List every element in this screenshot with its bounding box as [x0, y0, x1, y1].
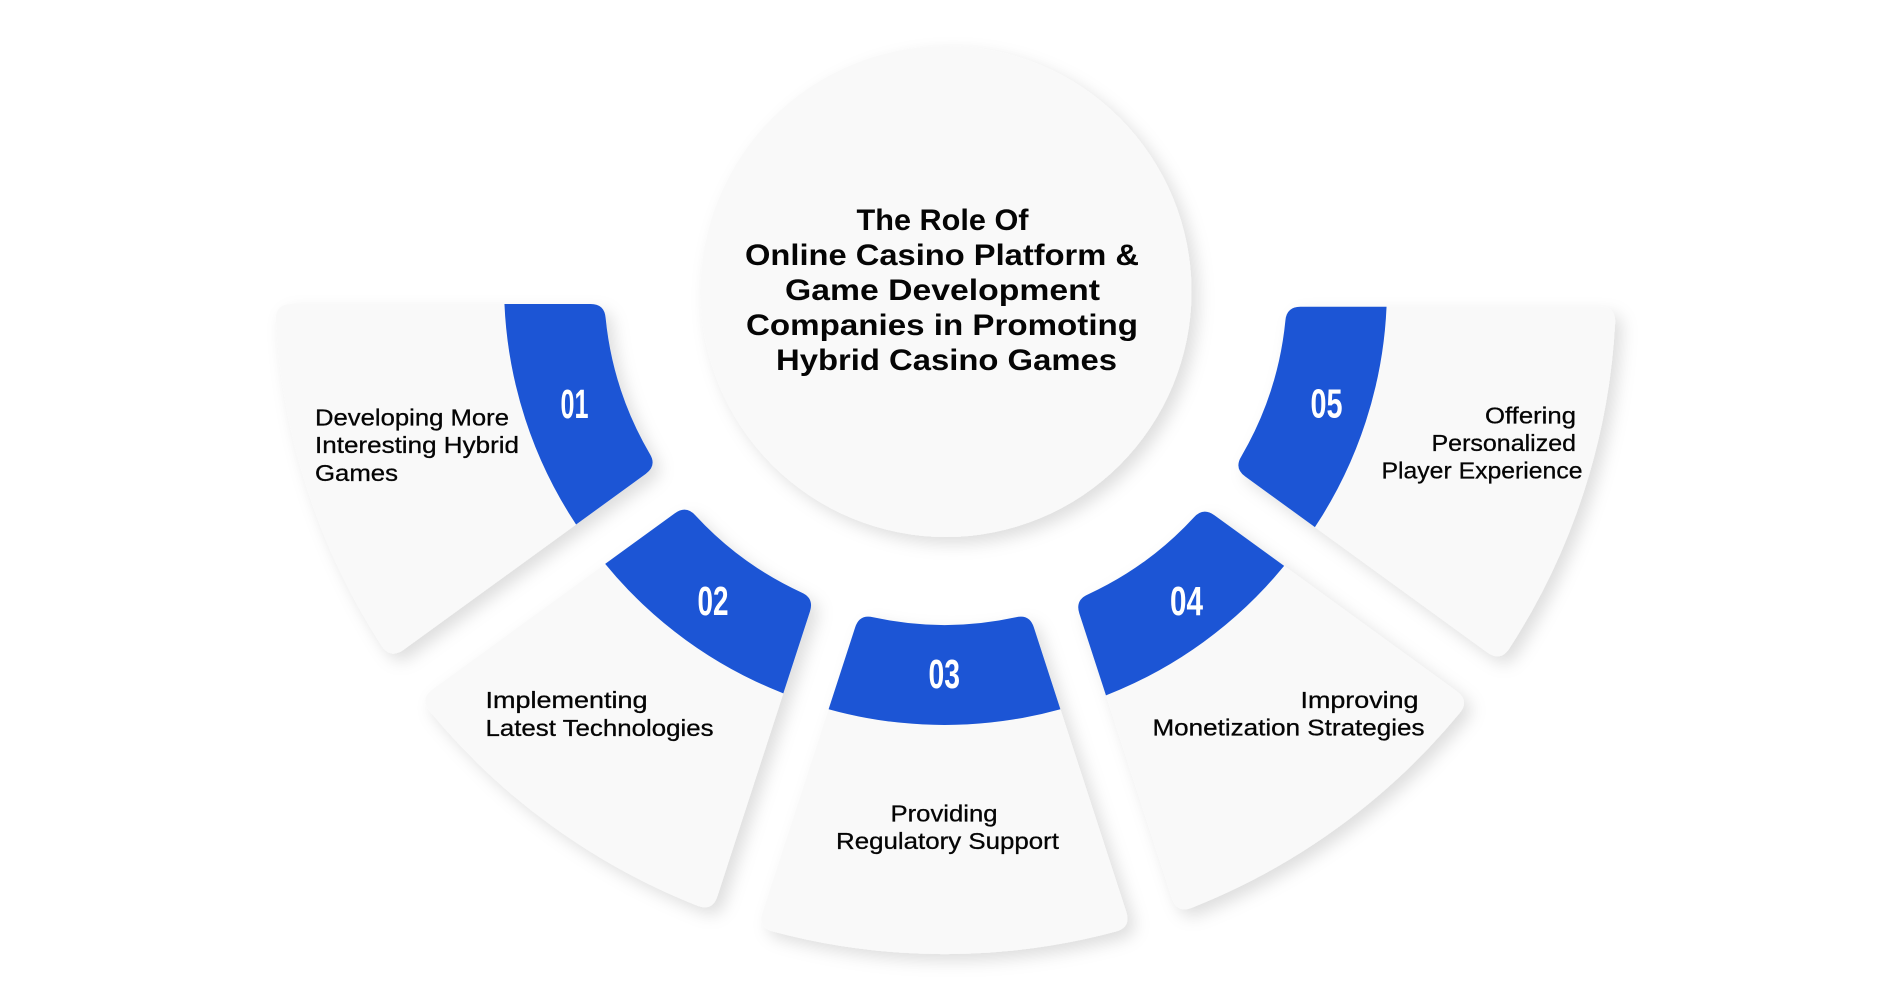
- title: The Role Of: [856, 204, 1030, 237]
- title: Companies in Promoting: [746, 309, 1138, 342]
- label 01: Interesting Hybrid: [315, 432, 519, 458]
- wedge 05: [1206, 214, 1640, 667]
- panel 04: monetization strategies: [997, 451, 1481, 932]
- label 04: [1152, 687, 1424, 740]
- panel 05: personalized experience: [1206, 214, 1640, 667]
- label 03: Providing: [890, 800, 998, 826]
- wedge 03: [762, 617, 1127, 954]
- label 01: Games: [315, 460, 398, 486]
- number 02: 02: [698, 578, 728, 624]
- title: Hybrid Casino Games: [776, 344, 1117, 377]
- number 05: 05: [1310, 380, 1342, 426]
- number 04: 04: [1170, 578, 1203, 624]
- panel 02: latest technologies: [408, 449, 892, 930]
- label 04: Improving: [1300, 687, 1418, 713]
- label 03: Regulatory Support: [836, 828, 1060, 854]
- wedge 01: [251, 212, 685, 664]
- label 04: Monetization Strategies: [1152, 714, 1424, 740]
- label 01: [315, 404, 519, 486]
- label 05: Personalized: [1432, 430, 1576, 456]
- label 05: [1382, 402, 1582, 484]
- title: Online Casino Platform &: [745, 239, 1139, 272]
- title: Game Development: [785, 274, 1100, 307]
- label 02: Implementing: [486, 687, 648, 713]
- circle background: [700, 46, 1192, 537]
- number 01: 01: [560, 381, 588, 427]
- panel: center circle: [700, 46, 1192, 537]
- title: [745, 204, 1139, 377]
- label 05: Player Experience: [1382, 458, 1582, 484]
- panel 01: developing games: [251, 212, 685, 664]
- wedge 02: [408, 449, 892, 930]
- wedge 04: [997, 451, 1481, 932]
- label 05: Offering: [1485, 402, 1576, 428]
- label 02: Latest Technologies: [486, 715, 714, 741]
- label 01: Developing More: [315, 404, 509, 430]
- panel 03: regulatory support: [762, 617, 1127, 954]
- label 02: [486, 687, 714, 741]
- label 03: [836, 800, 1060, 854]
- number 03: 03: [928, 651, 960, 697]
